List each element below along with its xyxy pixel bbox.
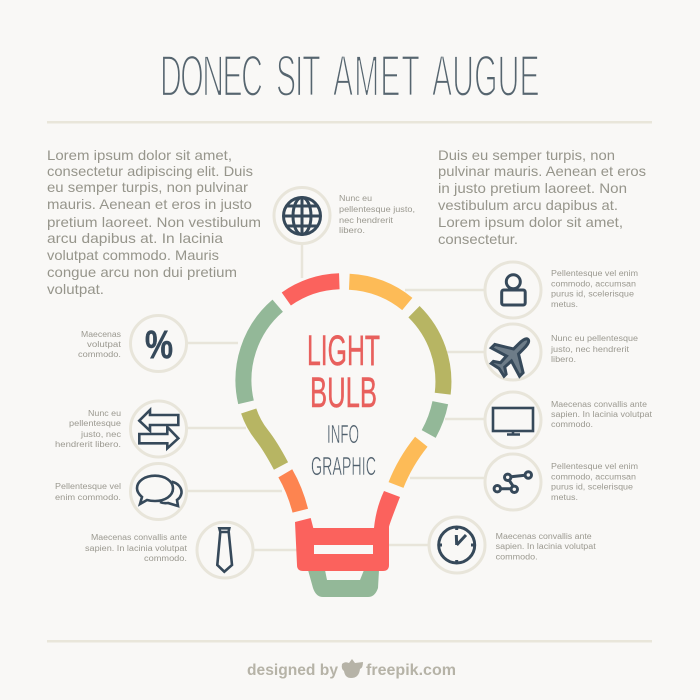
title: SIT: [276, 43, 321, 109]
text: globe: nec hendrerit: [339, 216, 394, 225]
bulb segment: green right: [429, 403, 440, 434]
text: monitor: commodo.: [551, 420, 593, 429]
right intro text: vestibulum arcu dapibus at.: [438, 197, 618, 213]
text: share: metus.: [551, 493, 578, 502]
icon: freepik bird: [342, 659, 363, 678]
bulb label: LIGHT: [307, 327, 380, 375]
left intro text: mauris. Aenean et eros in justo: [47, 196, 252, 212]
text: user: commodo, accumsan: [551, 280, 636, 288]
text: globe: libero.: [339, 226, 365, 235]
bulb label: [307, 327, 380, 481]
bulb segment: green left: [243, 306, 278, 402]
text: clock: sapien. In lacinia volutpat: [496, 542, 597, 551]
icon: globe: [284, 197, 320, 235]
icon: tie: [217, 528, 232, 572]
icon: speech bubbles: [137, 476, 182, 506]
text: arrows: justo, nec: [80, 430, 121, 439]
text: arrows: [55, 409, 122, 449]
bulb label: INFO: [327, 419, 359, 449]
text: plane: Nunc eu pellentesque: [551, 334, 639, 343]
footer credit: [247, 659, 456, 679]
title: AMET: [333, 43, 420, 109]
item: globe: [274, 188, 415, 244]
icon: share nodes: [494, 472, 532, 492]
text: user: [551, 269, 638, 309]
icon: monitor: [493, 408, 533, 434]
bulb segment: olive right: [414, 312, 443, 394]
left intro text: volutpat.: [47, 281, 104, 297]
footer credit: freepik.com: [366, 662, 456, 679]
text: percent: volutpat: [87, 340, 122, 349]
bulb base: red socket: [295, 491, 400, 571]
left intro text: eu semper turpis, non pulvinar: [47, 179, 248, 195]
text: percent: [78, 330, 122, 359]
left intro text: congue arcu non dui pretium: [47, 264, 237, 280]
item: clock: [429, 517, 597, 573]
left intro text: Lorem ipsum dolor sit amet,: [47, 147, 232, 163]
bulb segment: yellow lower: [396, 442, 421, 485]
item: monitor: [485, 392, 653, 448]
icon: arrows: [139, 410, 178, 448]
text: tie: [85, 533, 188, 563]
text: globe: pellentesque justo,: [339, 205, 415, 214]
bulb segment: yellow top: [349, 282, 407, 304]
text: share: purus id, scelerisque: [551, 483, 634, 492]
text: plane: [550, 334, 639, 364]
icon: user: [502, 275, 525, 305]
item: user: [485, 262, 638, 318]
item: chat: [55, 464, 186, 520]
text: plane: libero.: [551, 355, 576, 364]
item: tie: [85, 522, 253, 578]
text: globe: [339, 194, 415, 235]
right intro text: Lorem ipsum dolor sit amet,: [438, 214, 623, 230]
right intro text: in justo pretium laoreet. Non: [438, 180, 627, 196]
bulb base: green cap: [308, 570, 379, 597]
item: share: [485, 454, 638, 510]
text: globe: Nunc eu: [339, 194, 372, 203]
text: monitor: Maecenas convallis ante: [551, 400, 648, 409]
text: tie: commodo.: [144, 554, 187, 563]
text: clock: [496, 532, 597, 562]
bulb label: BULB: [310, 369, 377, 417]
bulb label: GRAPHIC: [311, 451, 376, 481]
title: [160, 43, 540, 109]
item: plane: [484, 324, 639, 384]
text: monitor: sapien. In lacinia volutpat: [551, 410, 653, 419]
title: DONEC: [160, 43, 263, 109]
icon: percent: %: [145, 323, 173, 367]
text: arrows: Nunc eu: [88, 409, 121, 418]
text: share: [551, 462, 638, 502]
text: clock: Maecenas convallis ante: [496, 532, 592, 541]
left intro text: pretium laoreet. Non vestibulum: [47, 214, 261, 230]
right intro text: [438, 147, 646, 247]
bulb segment: orange: [285, 473, 300, 511]
text: tie: sapien. In lacinia volutpat: [85, 544, 188, 553]
left intro text: consectetur adipiscing elit. Duis: [47, 163, 253, 179]
text: arrows: hendrerit libero.: [55, 440, 121, 449]
bulb segment: olive left: [249, 411, 281, 466]
light bulb: [243, 281, 443, 597]
text: chat: [55, 482, 121, 502]
connector lines: [187, 243, 485, 550]
icon: plane: [484, 325, 542, 384]
text: monitor: [551, 400, 653, 429]
item: percent: [78, 316, 186, 372]
title: AUGUE: [432, 43, 540, 109]
right intro text: pulvinar mauris. Aenean et eros: [438, 163, 646, 179]
text: tie: Maecenas convallis ante: [91, 533, 188, 542]
left intro text: arcu dapibus at. In lacinia: [47, 230, 223, 246]
right intro text: Duis eu semper turpis, non: [438, 147, 615, 163]
text: chat: Pellentesque vel: [55, 482, 121, 491]
footer credit: designed by: [247, 662, 338, 679]
text: share: Pellentesque vel enim: [551, 462, 638, 471]
text: chat: enim commodo.: [55, 493, 121, 502]
left intro text: [47, 147, 261, 297]
text: percent: commodo.: [78, 350, 121, 359]
left intro text: volutpat commodo. Mauris: [47, 247, 219, 263]
text: clock: commodo.: [496, 552, 538, 562]
text: share: commodo, accumsan: [551, 473, 636, 482]
right intro text: consectetur.: [438, 231, 518, 247]
icon: clock: [439, 527, 475, 563]
text: percent: Maecenas: [81, 330, 121, 339]
text: plane: justo, nec hendrerit: [550, 345, 630, 354]
text: arrows: pellentesque: [69, 419, 122, 428]
text: user: purus id, scelerisque: [551, 290, 635, 299]
text: user: metus.: [551, 300, 578, 309]
bulb segment: red top: [286, 281, 339, 299]
item: arrows: [55, 401, 186, 457]
text: user: Pellentesque vel enim: [551, 269, 638, 278]
